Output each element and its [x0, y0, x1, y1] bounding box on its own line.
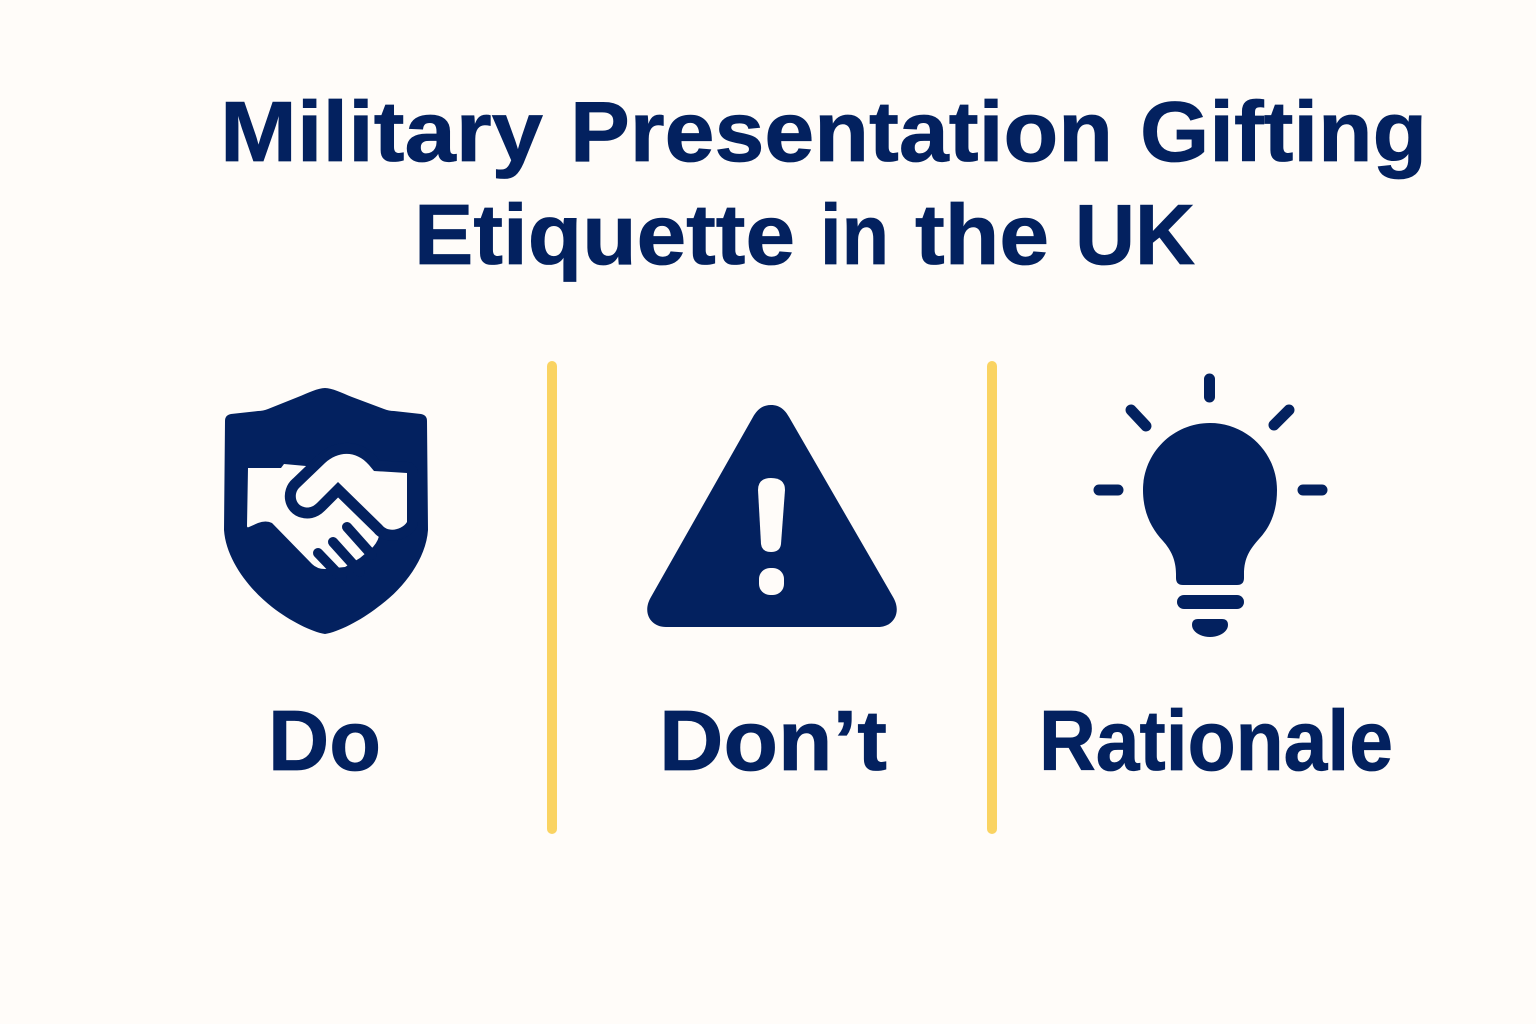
- title: in: [820, 188, 889, 283]
- label: Do: Do: [268, 694, 381, 789]
- title: Presentation: [570, 85, 1113, 180]
- title: the: [915, 188, 1049, 283]
- title: Etiquette: [414, 188, 795, 283]
- title: UK: [1075, 188, 1195, 283]
- label: Don't: Don’t: [659, 694, 887, 789]
- label: Rationale: Rationale: [1039, 694, 1393, 789]
- icon: warning triangle: [647, 405, 897, 627]
- divider: left: [547, 361, 557, 834]
- icon: shield with handshake: [224, 388, 428, 634]
- icon: light bulb: [1099, 379, 1322, 637]
- title: Gifting: [1140, 85, 1427, 180]
- title: Military: [220, 85, 543, 180]
- panel: don't: [647, 405, 897, 789]
- title: [220, 85, 1427, 283]
- panel: rationale: [1039, 379, 1393, 789]
- panel: do: [224, 388, 428, 789]
- divider: right: [987, 361, 997, 834]
